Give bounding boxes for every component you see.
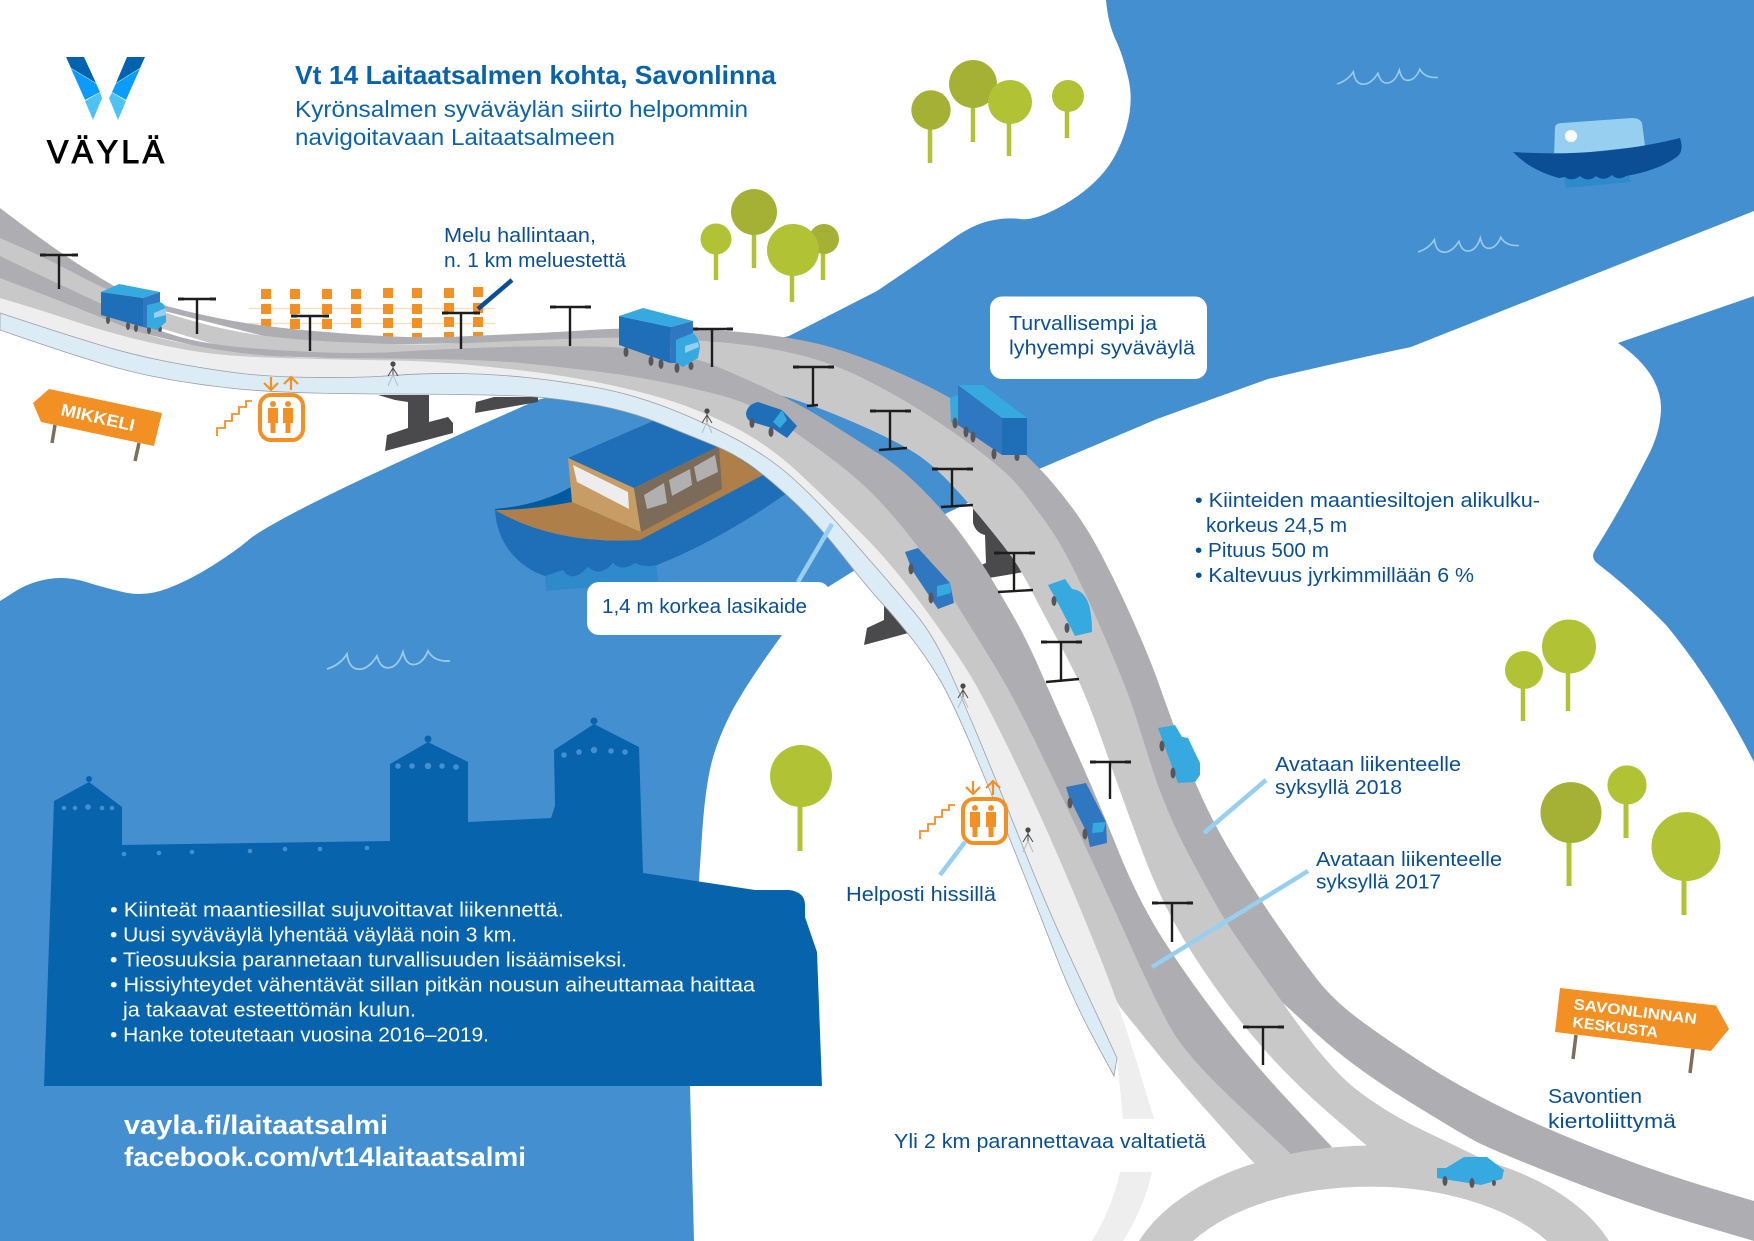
logo: Väylä: VÄYLÄ (47, 134, 165, 170)
label: opening 2018: syksyllä 2018 (1275, 777, 1402, 799)
bridge pier 4 (973, 500, 1024, 578)
trees: east upper (1505, 620, 1596, 721)
road: lane of old carriageway (0, 278, 1290, 1180)
bridge pier 2 (475, 397, 538, 413)
bus on new carriageway (1158, 725, 1200, 783)
wave (1337, 69, 1438, 84)
text block: bridge facts: • Kaltevuus jyrkimmillään 6 % (1195, 565, 1474, 587)
truck 2 (619, 308, 700, 373)
leader: glass railing (798, 524, 832, 582)
text block: bridge facts: korkeus 24,5 m (1206, 515, 1347, 537)
subtitle (295, 96, 748, 150)
text block: bridge facts: • Kiinteiden maantiesiltojen alikulku- (1195, 490, 1540, 512)
car in roundabout (1437, 1157, 1504, 1188)
label: noise barrier (444, 225, 627, 272)
web links: facebook.com/vt14laitaatsalmi (124, 1142, 526, 1172)
glass railing (0, 313, 1117, 1076)
elevator icon west (217, 377, 303, 440)
pedestrian and cycle path (0, 298, 1154, 1119)
trees: east lower (1540, 765, 1720, 915)
bus on old carriageway (1066, 783, 1107, 847)
label: opening 2017 (1316, 849, 1502, 894)
subtitle: navigoitavaan Laitaatsalmeen (295, 124, 615, 150)
text block: bridge facts (1195, 490, 1540, 587)
leader: noise barrier (478, 280, 512, 309)
trees: cluster above road (700, 189, 839, 302)
callout: safer fairway: lyhyempi syväväylä (1009, 338, 1196, 360)
road: lane of new carriageway (0, 238, 1503, 1200)
wave (327, 651, 450, 669)
label: opening 2018: Avataan liikenteelle (1275, 754, 1461, 776)
van (905, 548, 954, 609)
road: verge of old carriageway (0, 256, 1332, 1160)
path continuation south (1092, 1172, 1152, 1241)
castle silhouette (44, 718, 822, 1086)
label: noise barrier: n. 1 km meluestettä (444, 250, 627, 272)
callout: glass railing: 1,4 m korkea lasikaide (602, 596, 807, 618)
label: roundabout: kiertoliittymä (1548, 1111, 1677, 1133)
text block: project key points: • Tieosuuksia parannetaan turvallisuuden lisäämiseksi. (110, 950, 627, 972)
label: opening 2017: Avataan liikenteelle (1316, 849, 1502, 871)
web links (124, 1110, 526, 1172)
pedestrians (388, 361, 1033, 852)
noise barrier (249, 287, 495, 343)
sign: Savonlinnan keskusta: SAVONLINNAN (1573, 996, 1698, 1028)
car on new carriageway (1048, 579, 1092, 636)
text block: project key points: • Hanke toteutetaan vuosina 2016–2019. (110, 1024, 489, 1046)
web links: vayla.fi/laitaatsalmi (124, 1110, 388, 1140)
label: opening 2017: syksyllä 2017 (1316, 872, 1441, 894)
callout: safer fairway (990, 296, 1207, 379)
trees: north shore cluster (911, 60, 1084, 163)
leader: opening 2018 (1204, 780, 1266, 833)
small boat (1513, 118, 1682, 188)
text block: project key points (110, 900, 756, 1046)
sign: Mikkeli: MIKKELI (59, 400, 136, 435)
text block: bridge facts: • Pituus 500 m (1195, 540, 1329, 562)
wave (1418, 237, 1519, 252)
text block: project key points: • Uusi syväväylä lyhentää väylää noin 3 km. (110, 924, 517, 946)
text block: project key points: • Hissiyhteydet vähentävät sillan pitkän nousun aiheuttamaa haittaa (110, 974, 756, 996)
label: elevator: Helposti hissillä (846, 884, 997, 906)
leader: elevator (940, 842, 965, 875)
text block: project key points: ja takaavat esteettömän kulun. (122, 1000, 416, 1022)
large ship (495, 421, 787, 591)
leader: opening 2017 (1152, 871, 1308, 967)
label: highway improvement: Yli 2 km parannettavaa valtatietä (894, 1131, 1207, 1153)
label: roundabout (1548, 1086, 1677, 1133)
sign: Mikkeli (33, 389, 162, 461)
title: Vt 14 Laitaatsalmen kohta, Savonlinna (295, 60, 777, 90)
sign: Savonlinnan keskusta: KESKUSTA (1572, 1014, 1659, 1041)
bridge pier 3 (864, 570, 912, 645)
label: opening 2018 (1275, 754, 1461, 799)
water: eastern bay (1593, 296, 1754, 762)
tree: central (770, 745, 832, 851)
text block: project key points: • Kiinteät maantiesillat sujuvoittavat liikennettä. (110, 900, 564, 922)
callout: glass railing (587, 582, 830, 635)
car on old carriageway (746, 402, 797, 438)
logo: Väylä (47, 57, 165, 170)
truck 1 (101, 284, 166, 334)
truck 3 (950, 385, 1027, 461)
label: roundabout: Savontien (1548, 1086, 1642, 1108)
street lamps (40, 254, 1284, 1065)
sign: Savonlinnan keskusta (1555, 988, 1729, 1073)
elevator icon south (920, 781, 1006, 843)
callout: safer fairway: Turvallisempi ja (1009, 313, 1158, 335)
roundabout (1139, 1145, 1609, 1241)
label: noise barrier: Melu hallintaan, (444, 225, 596, 247)
subtitle: Kyrönsalmen syväväylän siirto helpommin (295, 96, 748, 122)
bridge pier 1 (378, 395, 453, 451)
